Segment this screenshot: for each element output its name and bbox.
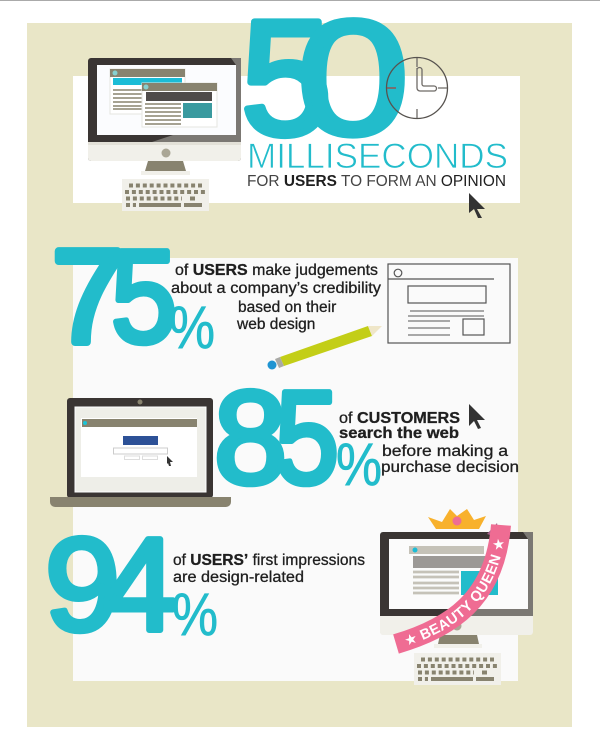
percent sign for 75: %: [169, 294, 215, 361]
light content panel: [73, 258, 518, 681]
text: first impressions: [173, 552, 365, 586]
statistic number: 75: 7: [52, 223, 124, 370]
text: users judge credibility: of USERS make judgements: [175, 262, 378, 279]
statistic number: 94: 9: [45, 511, 120, 658]
statistic number: 75: [52, 223, 177, 370]
text: users judge credibility: based on their: [238, 299, 336, 316]
icon: cursor arrow: [469, 193, 485, 218]
subheading: for users to form an opinion: FOR USERS TO FORM AN OPINION: [247, 173, 506, 190]
icon: crown: [428, 509, 486, 529]
statistic number: 94: [45, 511, 177, 658]
statistic number: 85: 5: [275, 364, 339, 511]
text: first impressions: of USERS’ first impressions: [173, 552, 365, 569]
sash: beauty queen: ★ BEAUTY QUEEN ★: [405, 539, 504, 645]
text: customers search the web: [339, 410, 519, 476]
text: first impressions: are design-related: [173, 569, 304, 586]
text: users judge credibility: about a company’s credibility: [171, 280, 381, 297]
statistic number: 85: [214, 364, 339, 511]
statistic number: 94: 4: [103, 511, 177, 658]
headline number: 50: [241, 0, 409, 169]
text: users judge credibility: [171, 262, 381, 333]
text: users judge credibility: web design: [236, 316, 315, 333]
icon: cursor arrow: [469, 404, 485, 429]
icon: desktop monitor with web pages: [88, 58, 241, 175]
heading: milliseconds: MILLISECONDS: [247, 136, 508, 176]
white header panel: [73, 76, 520, 203]
statistic number: 85: 8: [214, 364, 287, 511]
percent sign for 94: %: [172, 581, 218, 648]
icon: keyboard: [122, 179, 209, 211]
icon: laptop: [50, 398, 231, 507]
percent sign for 85: %: [336, 431, 382, 498]
icon: sketched website wireframe: [388, 264, 510, 343]
text: customers search the web: search the web: [339, 425, 459, 442]
icon: yellow pencil: [268, 326, 382, 370]
text: customers search the web: before making a: [382, 443, 508, 460]
text: customers search the web: purchase decision: [381, 459, 519, 476]
statistic number: 75: 5: [111, 223, 177, 370]
text: customers search the web: of CUSTOMERS: [339, 410, 460, 427]
icon: keyboard: [414, 653, 501, 685]
icon: clock: [386, 58, 448, 118]
icon: desktop monitor with crown and sash: [380, 509, 533, 685]
monitor body: [380, 532, 533, 648]
